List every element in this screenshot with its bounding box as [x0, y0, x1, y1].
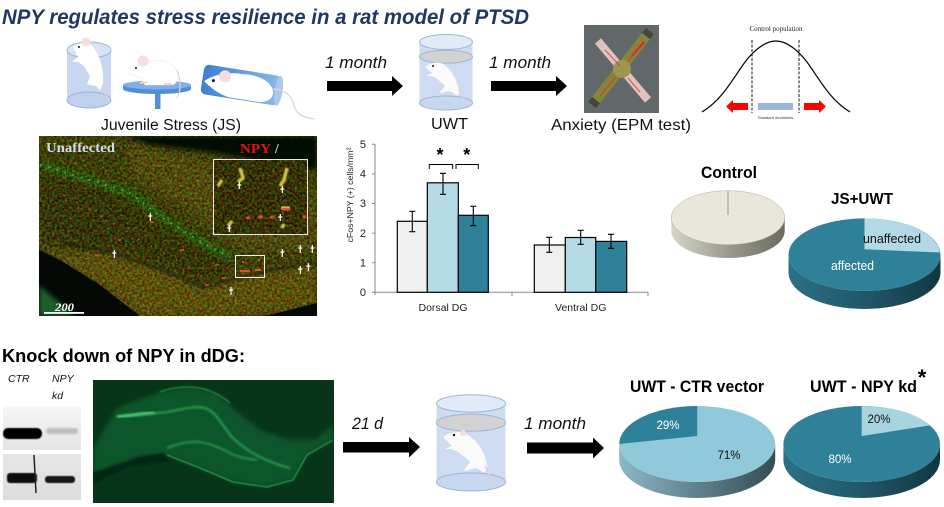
- icon: UWT water cylinder with mouse: [420, 34, 472, 110]
- label: juvenile stress: Juvenile Stress (JS): [101, 117, 241, 134]
- pie: UWT NPY kd: 20%: [867, 414, 891, 426]
- label: NPY: NPY: [240, 141, 271, 156]
- label: 21 d: 21 d: [351, 414, 384, 433]
- arrow: to cylinder: [343, 437, 420, 458]
- pie: UWT CTR vector: 29%: [656, 420, 680, 432]
- bar chart: cFos+NPY cells: Ventral DG: [555, 302, 606, 314]
- bar chart: cFos+NPY cells: [345, 139, 648, 314]
- bar chart: cFos+NPY cells: *: [463, 145, 470, 165]
- label: 1 month third: 1 month: [524, 415, 586, 433]
- pie: UWT NPY kd: 80%: [828, 454, 852, 466]
- bar chart: cFos+NPY cells: 5: [360, 139, 366, 151]
- scale bar: 200: [54, 300, 74, 314]
- pie: JS+UWT: [788, 191, 940, 309]
- inset: magnified cells: [214, 160, 308, 234]
- label: 1 month second: 1 month: [489, 54, 551, 72]
- micrograph: green virus expression: [93, 380, 334, 503]
- icon: elevated platform with mouse: [123, 56, 191, 109]
- pie: control: [671, 164, 785, 258]
- box: magnified area: [236, 256, 264, 278]
- western blot: NPY: [52, 373, 75, 385]
- bar chart: cFos+NPY cells: *: [436, 145, 444, 165]
- label: slash: /: [274, 141, 279, 156]
- western blot: [3, 373, 81, 500]
- label: unaffected: Unaffected: [46, 140, 116, 155]
- scale bar: [44, 304, 84, 314]
- pie: UWT CTR vector: UWT - CTR vector: [630, 377, 764, 396]
- title: NPY regulates stress resilience in a rat model of PTSD: [2, 6, 529, 29]
- arrow: to UWT: [327, 76, 403, 96]
- pie: UWT CTR vector: 71%: [717, 450, 741, 462]
- chart: bell curve: Standard deviations: [758, 115, 793, 120]
- bar chart: cFos+NPY cells: 2: [360, 228, 366, 240]
- bar chart: cFos+NPY cells: 3: [360, 198, 366, 210]
- pie: JS+UWT: affected: [831, 259, 874, 273]
- icon: juvenile stress tube with mouse: [67, 38, 111, 108]
- label: 1 month: 1 month: [325, 54, 387, 72]
- pie: JS+UWT: JS+UWT: [831, 191, 893, 208]
- pie: UWT NPY kd: [783, 365, 940, 498]
- photo: elevated plus maze: [584, 25, 659, 113]
- western blot: CTR: [8, 373, 30, 385]
- arrow: to EPM test: [491, 76, 567, 96]
- arrow: to pie charts: [527, 438, 604, 458]
- pie: UWT NPY kd: *: [918, 365, 927, 390]
- bar chart: cFos+NPY cells: 4: [360, 168, 366, 180]
- chart: bell curve: [702, 25, 850, 120]
- pie: JS+UWT: unaffected: [863, 232, 921, 246]
- bar chart: cFos+NPY cells: 1: [360, 258, 366, 270]
- bar chart: cFos+NPY cells: Dorsal DG: [418, 302, 468, 314]
- icon: UWT cylinder with mouse: [436, 395, 506, 491]
- chart: bell curve: Control population: [749, 25, 803, 33]
- pie: control: Control: [701, 164, 757, 182]
- label: UWT: UWT: [431, 116, 469, 133]
- bar chart: cFos+NPY cells: cFos+NPY (+) cells/mm²: [345, 147, 355, 242]
- western blot: kd: [52, 390, 64, 402]
- pie: UWT CTR vector: [619, 377, 775, 498]
- label: anxiety: Anxiety (EPM test): [551, 117, 691, 134]
- icon: restraint tube with mouse: [200, 64, 315, 119]
- heading: knock down: Knock down of NPY in dDG:: [2, 346, 245, 366]
- icons: white arrow markers: [112, 182, 314, 295]
- pie: UWT NPY kd: UWT - NPY kd: [810, 377, 917, 396]
- bar chart: cFos+NPY cells: 0: [360, 287, 366, 299]
- micrograph: unaffected NPY staining: [39, 136, 317, 316]
